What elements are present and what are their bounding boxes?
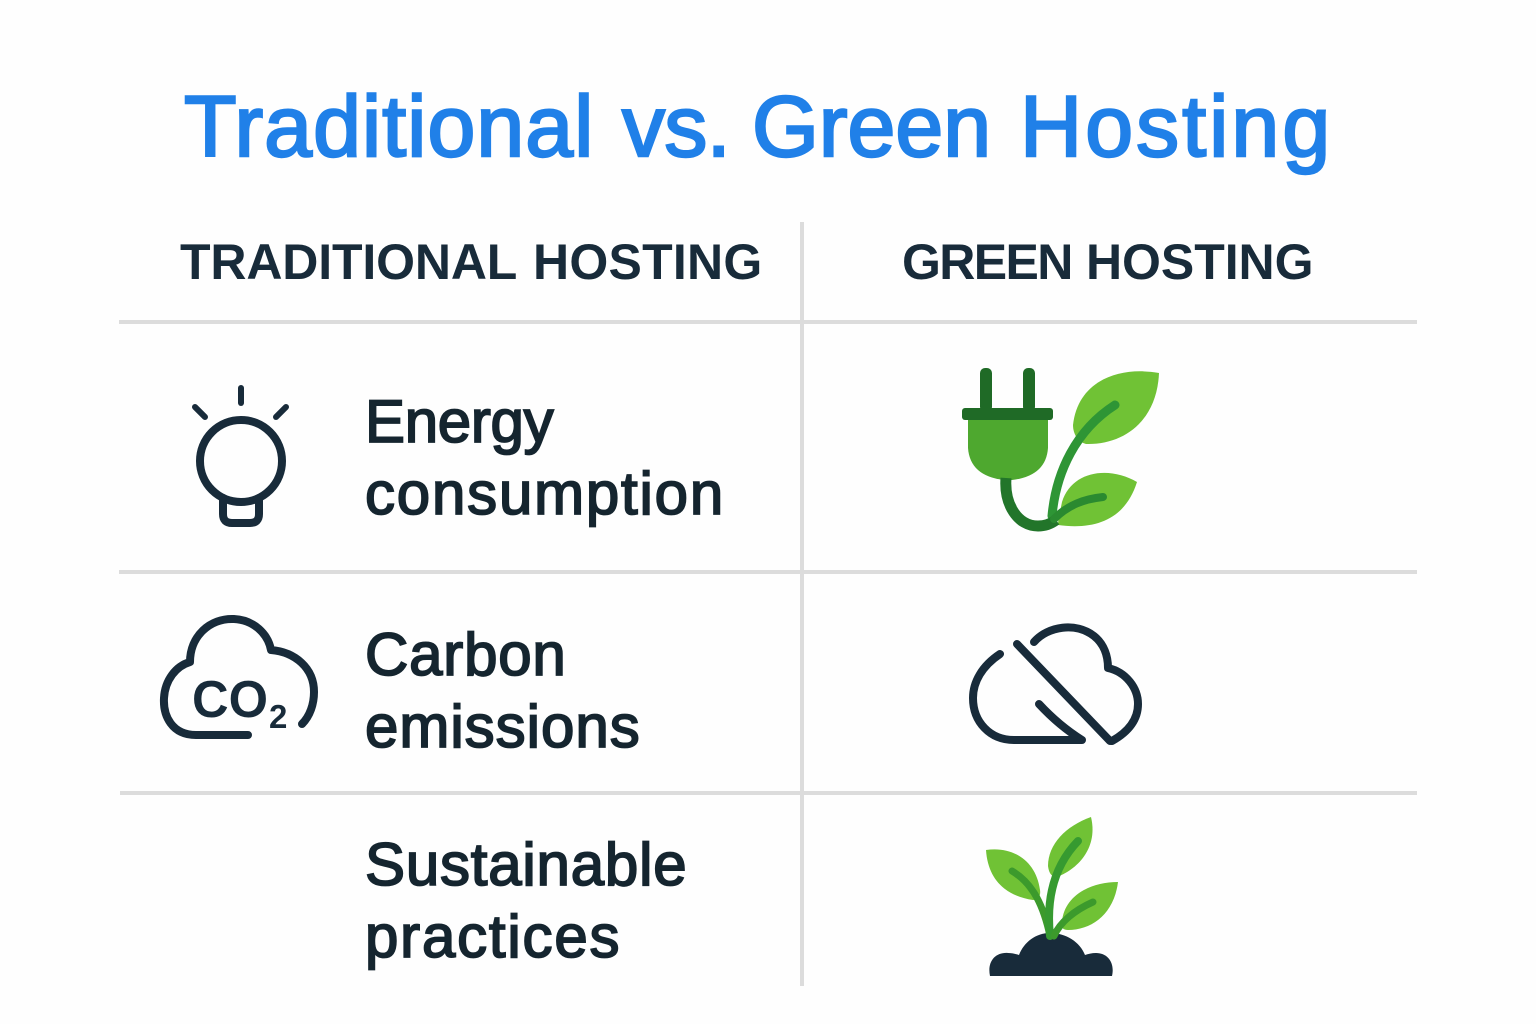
row label: carbon emissions xyxy=(365,621,641,760)
icon: crossed-out cloud xyxy=(969,623,1142,745)
row label: sustainable practices: practices xyxy=(365,903,621,970)
row label: sustainable practices xyxy=(365,831,687,970)
title xyxy=(184,79,1333,176)
column heading: green hosting: HOSTING xyxy=(1086,234,1313,290)
title: Green xyxy=(752,79,991,175)
row label: energy consumption: consumption xyxy=(365,460,725,527)
icon: light bulb xyxy=(192,385,289,527)
column heading: traditional hosting: TRADITIONAL xyxy=(180,234,517,290)
icon: CO2 cloud: CO xyxy=(192,671,268,729)
title: Hosting xyxy=(1020,79,1333,175)
row label: carbon emissions: emissions xyxy=(365,693,641,760)
icon: seedling xyxy=(986,817,1118,976)
title: vs. xyxy=(622,79,730,175)
icon: CO2 cloud: 2 xyxy=(269,698,287,735)
row label: energy consumption xyxy=(365,388,725,528)
column heading: green hosting xyxy=(902,234,1313,290)
column heading: green hosting: GREEN xyxy=(902,234,1072,290)
title: Traditional xyxy=(184,79,594,175)
row label: sustainable practices: Sustainable xyxy=(365,831,687,898)
icon: CO2 cloud xyxy=(160,615,318,739)
row label: carbon emissions: Carbon xyxy=(365,621,567,688)
row label: energy consumption: Energy xyxy=(365,388,553,455)
column heading: traditional hosting: HOSTING xyxy=(533,234,763,290)
icon: plug with leaves xyxy=(962,368,1159,532)
column heading: traditional hosting xyxy=(180,234,763,290)
